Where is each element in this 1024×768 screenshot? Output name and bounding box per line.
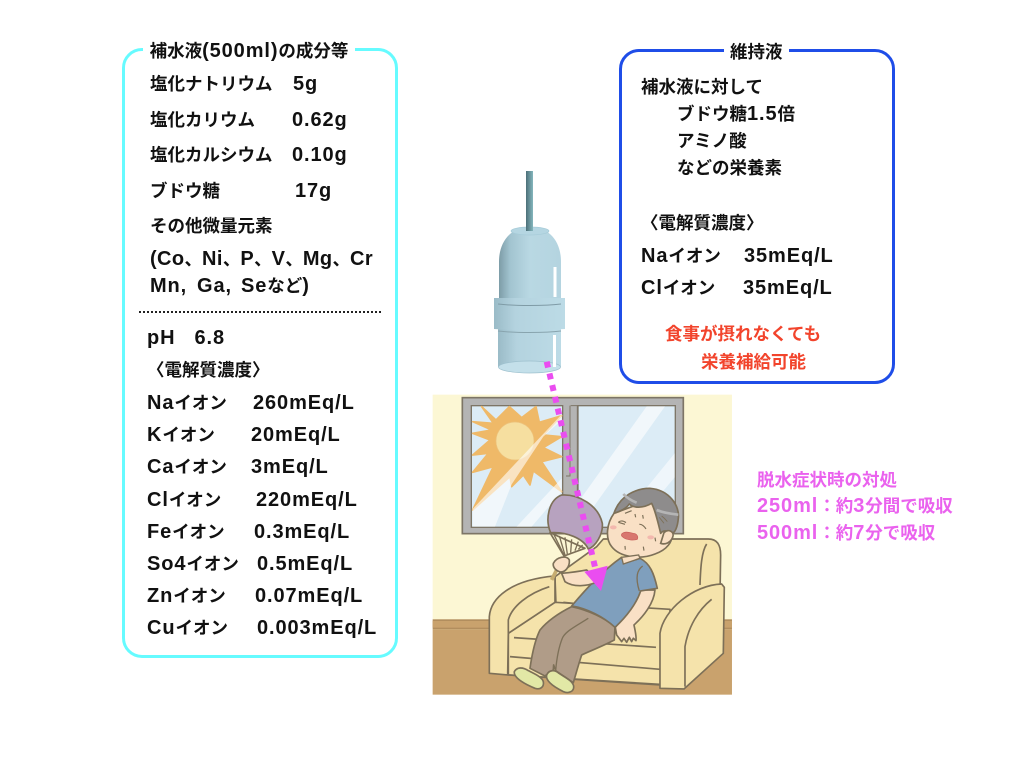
- maintenance nutrients text: などの栄養素: [677, 158, 782, 178]
- illustration: drip chamber: [494, 171, 565, 373]
- maintenance electrolyte: sodium: Naイオン: [641, 245, 721, 267]
- electrolyte: sodium: [147, 392, 355, 414]
- maintenance electrolyte: chloride: Clイオン: [641, 277, 715, 299]
- maintenance electrolyte: chloride: [641, 277, 833, 299]
- maintenance electrolyte: chloride: 35mEq/L: [743, 277, 833, 299]
- electrolyte: potassium: 20mEq/L: [251, 424, 341, 446]
- electrolyte: sulfate: [147, 553, 353, 575]
- ingredient: trace elements: その他微量元素: [150, 216, 272, 236]
- electrolyte: sulfate: 0.5mEq/L: [257, 553, 353, 575]
- electrolyte: potassium: Kイオン: [147, 424, 215, 446]
- legs: [514, 607, 615, 693]
- ingredient: sodium chloride: 5g: [293, 73, 318, 95]
- ingredient: sodium chloride: 塩化ナトリウム: [150, 74, 272, 94]
- electrolyte: chloride: [147, 489, 358, 511]
- heading: maintenance solution: [724, 40, 788, 64]
- maintenance nutrients text: [641, 77, 795, 178]
- pH value: pH 6.8: [147, 327, 225, 349]
- electrolyte: iron: [147, 521, 350, 543]
- electrolyte: calcium: [147, 456, 329, 478]
- heading: rehydration solution: 補水液(500ml)の成分等: [150, 40, 348, 62]
- electrolyte: iron: Feイオン: [147, 521, 225, 543]
- dotted divider: [139, 311, 381, 313]
- ingredient: calcium chloride: [150, 144, 348, 166]
- trace element list: (Co、Ni、P、V、Mg、Cr: [150, 248, 373, 270]
- ingredient: potassium chloride: [150, 109, 348, 131]
- panel: rehydration solution: [122, 40, 398, 658]
- illustration: overheated man on sofa: [433, 395, 732, 695]
- electrolyte: copper: 0.003mEq/L: [257, 617, 377, 639]
- callout: nutrition possible: 栄養補給可能: [701, 352, 806, 372]
- electrolyte: sodium: Naイオン: [147, 392, 227, 414]
- arrow: infusion flow: [547, 362, 608, 591]
- maintenance electrolyte: sodium: 35mEq/L: [744, 245, 834, 267]
- heading: electrolyte concentration: 〈電解質濃度〉: [147, 360, 270, 380]
- electrolyte: chloride: 220mEq/L: [256, 489, 358, 511]
- ingredient: potassium chloride: 塩化カリウム: [150, 110, 255, 130]
- maintenance nutrients text: アミノ酸: [677, 131, 747, 151]
- ingredient: sodium chloride: [150, 73, 318, 95]
- electrolyte: sulfate: So4イオン: [147, 553, 239, 575]
- electrolyte: zinc: [147, 585, 363, 607]
- maintenance nutrients text: 補水液に対して: [641, 77, 763, 97]
- trace element list: [150, 248, 373, 297]
- wall: [433, 395, 732, 695]
- heading: maintenance electrolytes: 〈電解質濃度〉: [641, 213, 764, 233]
- ingredient: calcium chloride: 塩化カルシウム: [150, 145, 272, 165]
- electrolyte: copper: [147, 617, 377, 639]
- ingredient: glucose: ブドウ糖: [150, 181, 220, 201]
- trace element list: Ga,: [197, 275, 232, 297]
- electrolyte: calcium: Caイオン: [147, 456, 227, 478]
- callout: dehydration treatment: 250ml：約3分間で吸収: [757, 495, 953, 517]
- mouth: [621, 532, 638, 540]
- ingredient: calcium chloride: 0.10g: [292, 144, 348, 166]
- maintenance electrolyte: sodium: [641, 245, 834, 267]
- ingredient: glucose: 17g: [295, 180, 332, 202]
- sofa: [489, 539, 724, 689]
- near arm: [562, 570, 598, 586]
- electrolyte: zinc: Znイオン: [147, 585, 226, 607]
- head: [607, 488, 678, 564]
- maintenance nutrients text: ブドウ糖1.5倍: [677, 103, 795, 125]
- floor and skirting: [433, 619, 732, 629]
- electrolyte: iron: 0.3mEq/L: [254, 521, 350, 543]
- trace element list: Mn,: [150, 275, 187, 297]
- callout: dehydration treatment: 500ml：約7分で吸収: [757, 522, 935, 544]
- heading: maintenance solution: 維持液: [730, 42, 782, 62]
- far arm: [615, 590, 655, 642]
- callout: nutrition possible: 食事が摂れなくても: [665, 324, 821, 344]
- callout: dehydration treatment: [757, 470, 953, 544]
- electrolyte: sodium: 260mEq/L: [253, 392, 355, 414]
- panel: maintenance solution: [619, 42, 895, 384]
- electrolyte: chloride: Clイオン: [147, 489, 221, 511]
- electrolyte: zinc: 0.07mEq/L: [255, 585, 363, 607]
- window: [462, 398, 683, 534]
- electrolyte: calcium: 3mEq/L: [251, 456, 329, 478]
- callout: dehydration treatment: 脱水症状時の対処: [757, 470, 897, 490]
- ingredient: potassium chloride: 0.62g: [292, 109, 348, 131]
- fan: [548, 495, 602, 580]
- callout: nutrition possible: [665, 324, 821, 372]
- ingredient: glucose: [150, 180, 332, 202]
- electrolyte: copper: Cuイオン: [147, 617, 228, 639]
- electrolyte: potassium: [147, 424, 341, 446]
- slippers: [514, 668, 543, 689]
- shirt: [572, 557, 657, 627]
- trace element list: Seなど): [241, 275, 310, 297]
